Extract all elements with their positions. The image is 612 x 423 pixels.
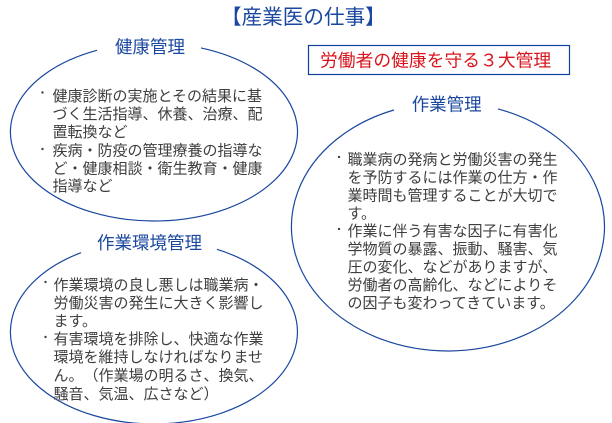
text block: 学物質の暴露、振動、騒害、気	[348, 240, 558, 258]
callout: three major controls: 労働者の健康を守る３大管理	[320, 50, 551, 70]
text block	[44, 277, 264, 403]
text block: 労働者の高齢化、などによりそ	[348, 277, 557, 294]
text block: 業時間も管理することが大切で	[348, 186, 558, 204]
panel: work environment management	[10, 233, 297, 423]
heading: 作業管理	[412, 94, 482, 114]
title: 【産業医の仕事】	[221, 6, 386, 29]
text block: 作業環境の良し悪しは職業病・	[54, 277, 264, 294]
text block: 有害環境を排除し、快適な作業	[54, 331, 264, 348]
heading: 作業環境管理	[97, 233, 202, 253]
callout: three major controls	[308, 46, 570, 74]
text block: 指導など	[52, 178, 113, 195]
panel: work management	[291, 94, 604, 351]
text block: 環境を維持しなければなりませ	[54, 349, 263, 366]
text block	[338, 152, 558, 312]
text block: ます。	[54, 313, 97, 330]
panel outline	[10, 249, 297, 423]
text block: 騒音、気温、広さなど）	[54, 386, 219, 403]
text block	[41, 88, 263, 195]
text block: の因子も変わってきています。	[348, 295, 555, 312]
text block: 置転換など	[52, 124, 128, 141]
text block: ど・健康相談・衛生教育・健康	[52, 160, 263, 178]
text block: 疾病・防疫の管理療養の指導な	[52, 142, 263, 160]
heading: 健康管理	[115, 37, 185, 57]
text block: す。	[348, 206, 376, 222]
text block: づく生活指導、休養、治療、配	[52, 106, 263, 123]
text block: ん。（作業場の明るさ、換気、	[54, 368, 264, 384]
text block: 圧の変化、などがありますが、	[348, 259, 557, 276]
panel outline	[291, 109, 604, 351]
text block: 作業に伴う有害な因子に有害化	[348, 223, 558, 240]
panel: health management	[10, 37, 297, 221]
text block: 職業病の発病と労働災害の発生	[348, 152, 558, 168]
text block: 健康診断の実施とその結果に基	[52, 88, 262, 105]
text block: 労働災害の発生に大きく影響し	[54, 295, 264, 312]
text block: を予防するには作業の仕方・作	[348, 170, 558, 186]
panel outline	[10, 48, 297, 221]
